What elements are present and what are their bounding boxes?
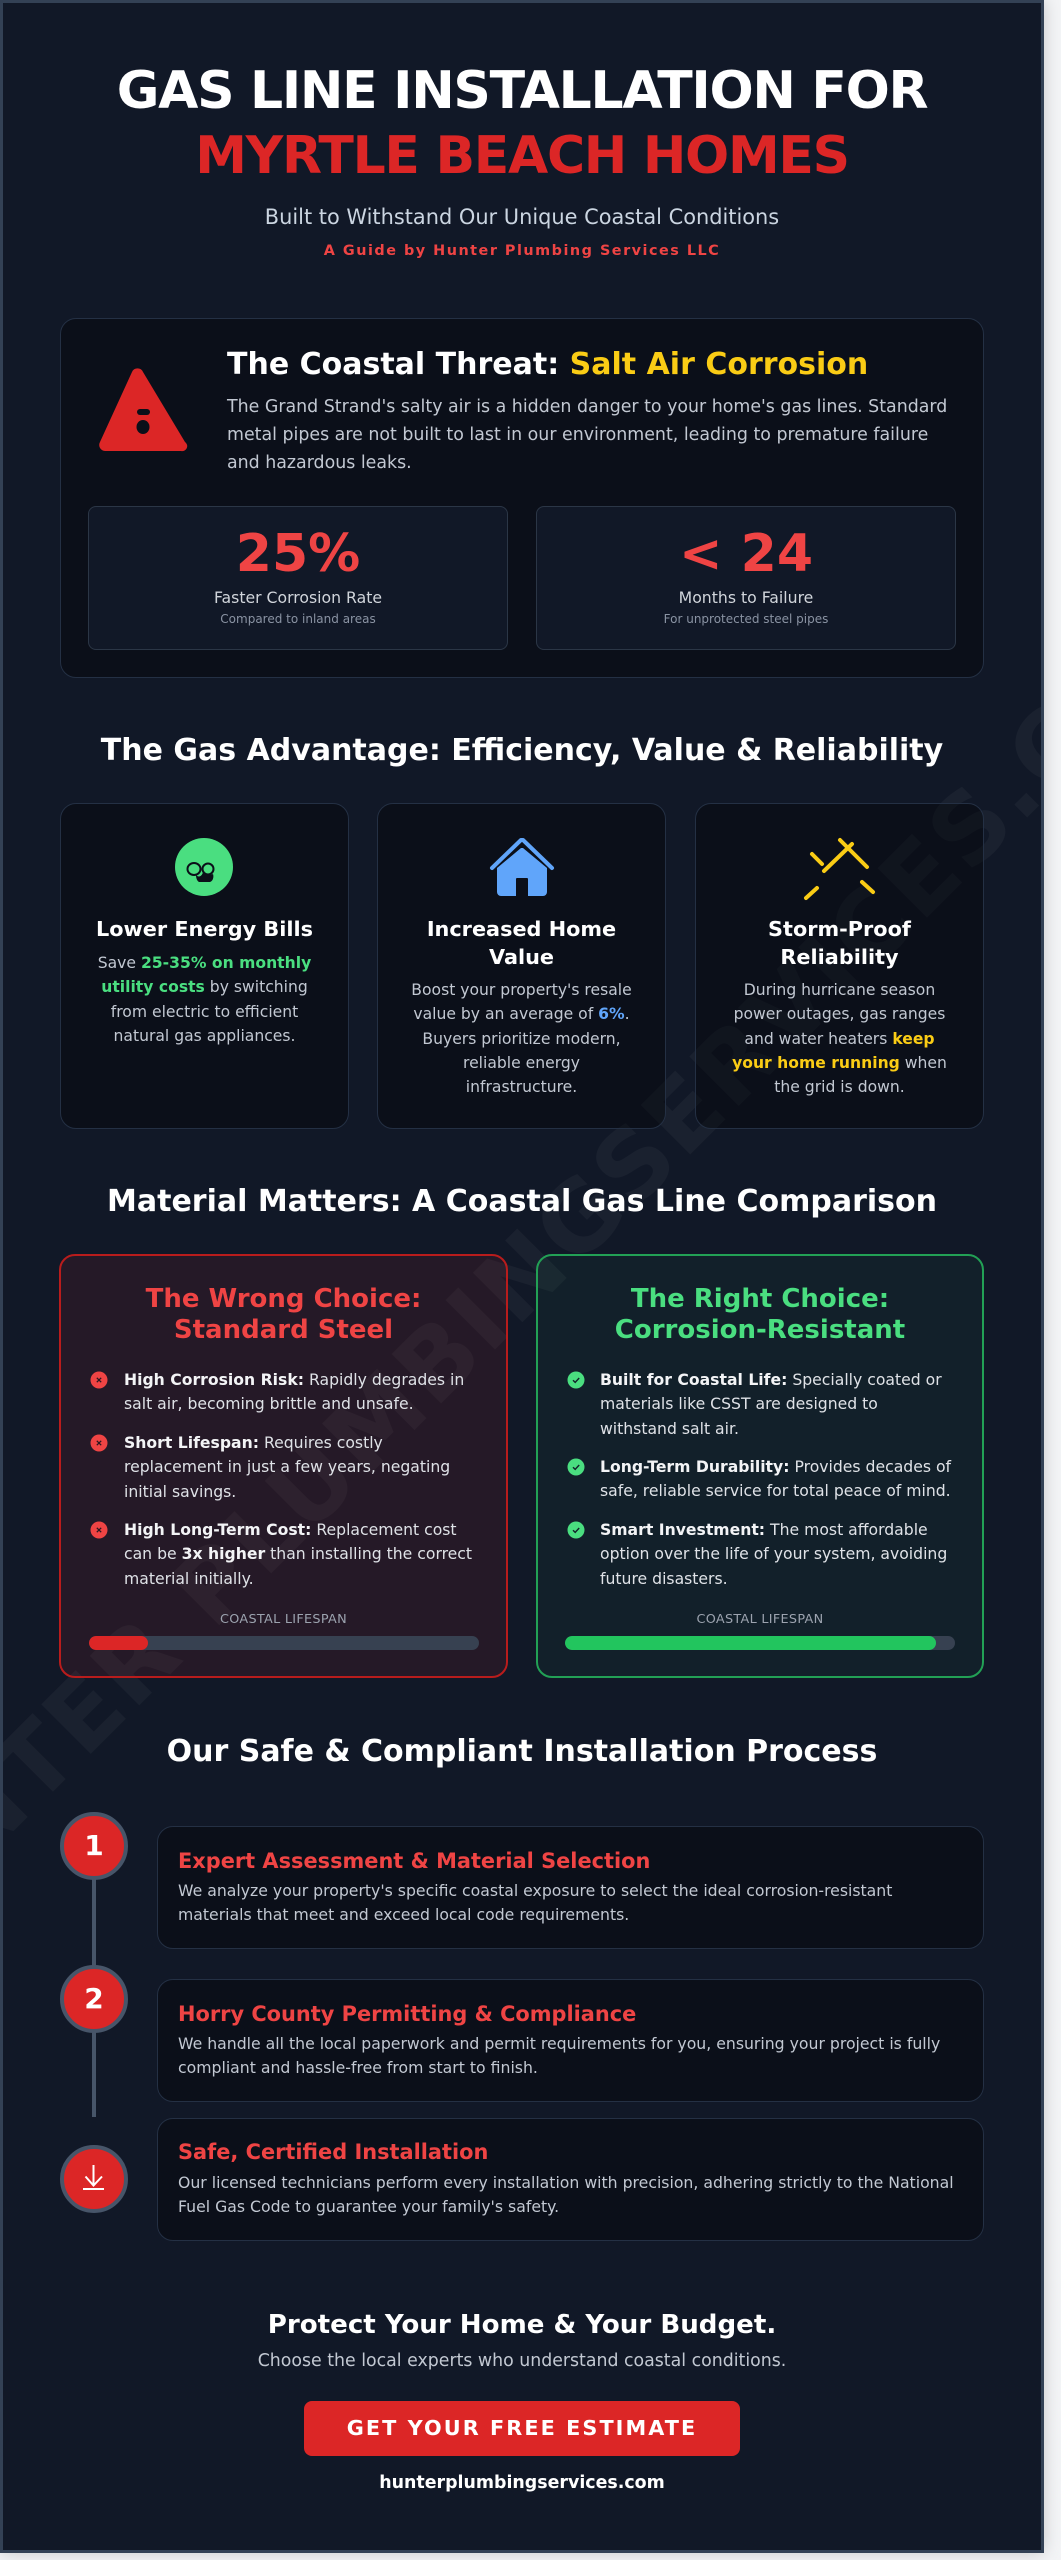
card: increased home value bbox=[377, 803, 666, 1129]
icon: x bbox=[90, 1434, 108, 1452]
heading bbox=[615, 1284, 905, 1345]
stat: corrosion rate bbox=[88, 506, 508, 650]
text: reliable energy bbox=[463, 1054, 580, 1072]
step 3 marker bbox=[60, 2145, 128, 2213]
text bbox=[732, 981, 947, 1096]
text bbox=[124, 1520, 472, 1588]
footer call to action bbox=[258, 2310, 786, 2493]
heading bbox=[146, 1284, 421, 1345]
note: For unprotected steel pipes bbox=[664, 612, 828, 626]
card: storm-proof reliability bbox=[695, 803, 984, 1129]
text: natural gas appliances. bbox=[114, 1027, 295, 1045]
step text: We handle all the local paperwork and permit requirements for you, ensuring your project is fully bbox=[178, 2034, 940, 2053]
step 1 card bbox=[157, 1826, 984, 1949]
heading: The Wrong Choice: bbox=[146, 1284, 421, 1314]
icon: check bbox=[568, 1372, 584, 1388]
icon: savings circle bbox=[175, 838, 233, 896]
text: value by an average of 6%. bbox=[413, 1005, 630, 1023]
website: hunterplumbingservices.com bbox=[379, 2473, 665, 2493]
text: safe, reliable service for total peace of mind. bbox=[600, 1481, 951, 1500]
heading: Protect Your Home & Your Budget. bbox=[268, 2310, 776, 2340]
icon: storm lines bbox=[804, 838, 876, 900]
heading: The Right Choice: bbox=[631, 1284, 889, 1314]
text: and water heaters keep bbox=[744, 1030, 935, 1048]
bar fill bbox=[89, 1636, 148, 1650]
step 2 card bbox=[157, 1979, 984, 2102]
text: from electric to efficient bbox=[111, 1003, 298, 1021]
number: < 24 bbox=[679, 524, 813, 584]
text bbox=[600, 1520, 947, 1588]
text bbox=[124, 1370, 464, 1413]
icon: check bbox=[568, 1458, 584, 1476]
text: power outages, gas ranges bbox=[734, 1005, 945, 1023]
text: Save 25-35% on monthly bbox=[98, 954, 311, 972]
step text: We analyze your property's specific coastal exposure to select the ideal corrosion-resistant bbox=[178, 1881, 892, 1900]
number: 25% bbox=[236, 524, 360, 584]
text: threat description: The Grand Strand's salty air is a hidden danger to your home's gas lines. Standard bbox=[227, 397, 947, 417]
step 1 marker: 1 bbox=[84, 1829, 104, 1862]
bar fill bbox=[565, 1636, 936, 1650]
step text: materials that meet and exceed local code requirements. bbox=[178, 1905, 629, 1924]
text: During hurricane season bbox=[744, 981, 935, 999]
text: future disasters. bbox=[600, 1569, 728, 1588]
step text: compliant and hassle-free from start to finish. bbox=[178, 2058, 538, 2077]
text: salt air, becoming brittle and unsafe. bbox=[124, 1394, 414, 1413]
text: your home running when bbox=[732, 1054, 947, 1072]
heading: gas advantage: The Gas Advantage: Efficiency, Value & Reliability bbox=[101, 733, 943, 768]
step title: Safe, Certified Installation bbox=[178, 2140, 488, 2164]
text: can be 3x higher than installing the correct bbox=[124, 1544, 472, 1563]
note: Compared to inland areas bbox=[220, 612, 376, 626]
text: utility costs by switching bbox=[101, 978, 308, 996]
card: lower energy bills bbox=[60, 803, 349, 1129]
stat: months to failure bbox=[536, 506, 956, 650]
heading: installation process: Our Safe & Compliant Installation Process bbox=[167, 1734, 877, 1769]
panel: coastal threat bbox=[60, 318, 984, 678]
header bbox=[117, 61, 928, 259]
list item: smart investment bbox=[568, 1520, 947, 1588]
text: High Long-Term Cost: Replacement cost bbox=[124, 1520, 457, 1539]
text: withstand salt air. bbox=[600, 1419, 739, 1438]
text: threat description: metal pipes are not built to last in our environment, leading to premature failure bbox=[227, 425, 928, 445]
list item: short lifespan bbox=[90, 1433, 450, 1501]
text: threat description: and hazardous leaks. bbox=[227, 453, 412, 473]
text: infrastructure. bbox=[466, 1078, 577, 1096]
text: replacement in just a few years, negating bbox=[124, 1457, 450, 1476]
step title: Horry County Permitting & Compliance bbox=[178, 2002, 636, 2026]
heading: Standard Steel bbox=[174, 1315, 393, 1345]
heading bbox=[768, 917, 912, 969]
icon: x bbox=[90, 1372, 108, 1388]
list item: durability bbox=[568, 1457, 952, 1500]
lifespan bar bbox=[565, 1636, 955, 1650]
label: Faster Corrosion Rate bbox=[214, 588, 382, 607]
text bbox=[98, 954, 311, 1045]
step title: Expert Assessment & Material Selection bbox=[178, 1849, 650, 1873]
label: COASTAL LIFESPAN bbox=[697, 1612, 823, 1627]
text: material initially. bbox=[124, 1569, 254, 1588]
text: materials like CSST are designed to bbox=[600, 1394, 878, 1413]
text: threat description bbox=[226, 397, 947, 473]
text bbox=[124, 1433, 450, 1501]
icon: download arrow bbox=[83, 2165, 104, 2190]
step 2 marker bbox=[60, 1965, 128, 2033]
text: option over the life of your system, avoiding bbox=[600, 1544, 947, 1563]
title: MYRTLE BEACH HOMES bbox=[195, 126, 849, 186]
text: Built for Coastal Life: Specially coated or bbox=[600, 1370, 942, 1389]
button: GET YOUR FREE ESTIMATE bbox=[347, 2416, 697, 2440]
heading: Storm-Proof bbox=[768, 917, 911, 941]
icon: warning triangle bbox=[99, 368, 188, 452]
heading: Lower Energy Bills bbox=[96, 917, 313, 941]
step 3 card bbox=[157, 2118, 984, 2241]
timeline connector bbox=[92, 1860, 96, 2117]
text bbox=[600, 1457, 952, 1500]
text: Buyers prioritize modern, bbox=[422, 1030, 621, 1048]
text: Long-Term Durability: Provides decades of bbox=[600, 1457, 951, 1476]
text: High Corrosion Risk: Rapidly degrades in bbox=[124, 1370, 464, 1389]
text: Smart Investment: The most affordable bbox=[600, 1520, 928, 1539]
panel: right choice bbox=[536, 1254, 984, 1678]
list item: corrosion risk bbox=[90, 1370, 464, 1413]
label: COASTAL LIFESPAN bbox=[220, 1612, 347, 1627]
text bbox=[600, 1370, 942, 1438]
icon: x bbox=[90, 1522, 108, 1538]
step 2 marker: 2 bbox=[84, 1982, 104, 2015]
title bbox=[117, 61, 928, 186]
heading: Reliability bbox=[780, 945, 899, 969]
text: the grid is down. bbox=[774, 1078, 905, 1096]
panel: wrong choice bbox=[59, 1254, 508, 1678]
list item: long-term cost bbox=[90, 1520, 472, 1588]
button bbox=[304, 2401, 740, 2456]
text: initial savings. bbox=[124, 1482, 236, 1501]
label: Months to Failure bbox=[679, 588, 813, 607]
byline: A Guide by Hunter Plumbing Services LLC bbox=[324, 243, 720, 259]
text: Choose the local experts who understand coastal conditions. bbox=[258, 2351, 786, 2371]
heading: Value bbox=[489, 945, 554, 969]
step text: Our licensed technicians perform every installation with precision, adhering strictly to the National bbox=[178, 2173, 954, 2192]
heading: material matters: Material Matters: A Coastal Gas Line Comparison bbox=[107, 1184, 937, 1219]
list item: coastal life bbox=[568, 1370, 942, 1438]
step text bbox=[178, 1881, 892, 1924]
icon: house bbox=[490, 838, 554, 896]
step text bbox=[178, 2173, 954, 2216]
text: Boost your property's resale bbox=[411, 981, 632, 999]
subtitle: Built to Withstand Our Unique Coastal Conditions bbox=[265, 205, 779, 229]
title: GAS LINE INSTALLATION FOR bbox=[117, 61, 927, 121]
lifespan bar bbox=[89, 1636, 479, 1650]
heading bbox=[427, 917, 616, 969]
step text bbox=[178, 2034, 940, 2077]
text bbox=[411, 981, 632, 1096]
step text: Fuel Gas Code to guarantee your family's safety. bbox=[178, 2197, 559, 2216]
text: Short Lifespan: Requires costly bbox=[124, 1433, 383, 1452]
heading: Corrosion-Resistant bbox=[615, 1315, 905, 1345]
heading: coastal threat: The Coastal Threat: Salt Air Corrosion bbox=[227, 347, 868, 382]
heading: Increased Home bbox=[427, 917, 616, 941]
step 1 marker bbox=[60, 1812, 128, 1880]
icon: check bbox=[568, 1522, 584, 1538]
